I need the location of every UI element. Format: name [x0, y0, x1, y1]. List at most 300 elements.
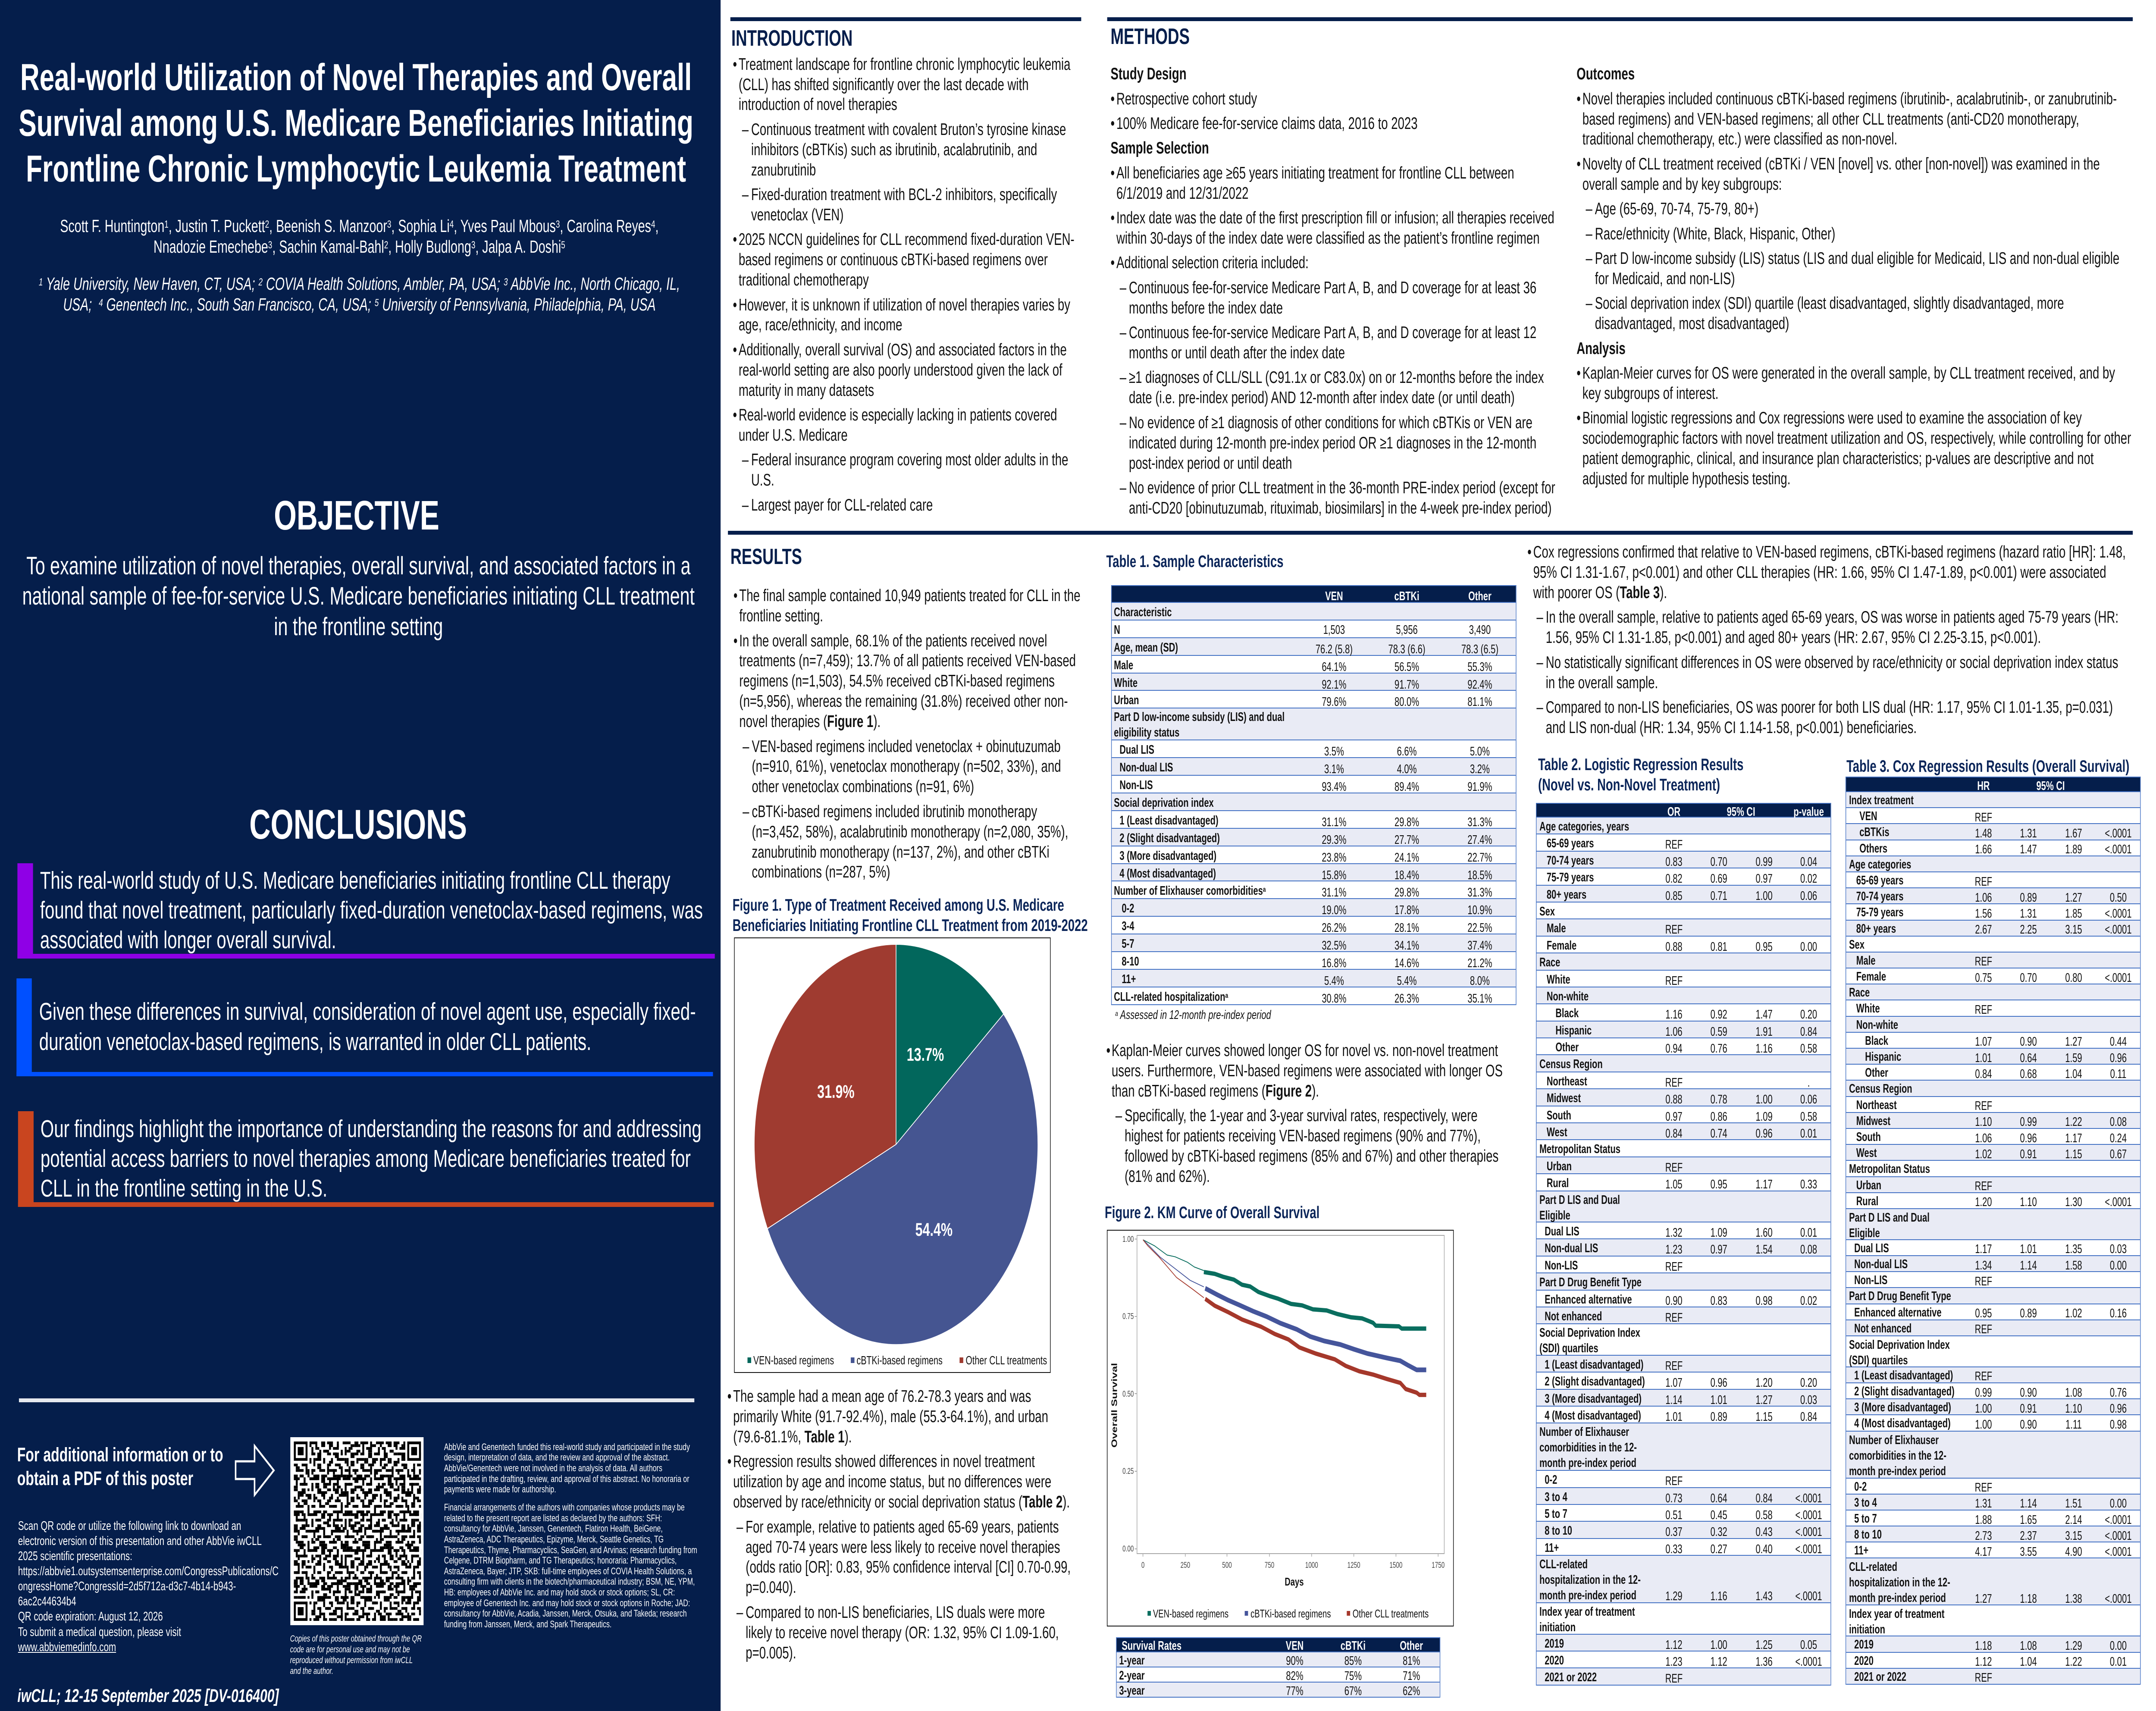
table 2: logistic regression: <.0001: [1795, 1589, 1822, 1603]
KM legend: [1147, 1607, 1429, 1620]
table 3: Cox regression: 0.99: [2020, 1115, 2037, 1129]
table 3 header: [1846, 777, 2140, 792]
table 3: Cox regression: Index treatment: [1849, 793, 1914, 807]
table 3: Cox regression: 3 to 4: [1854, 1496, 1877, 1510]
table 2: logistic regression: 0.97: [1755, 872, 1773, 886]
table 1: sample characteristics: 11+: [1122, 972, 1136, 986]
methods: outcomes and analysis: Novel therapies included continuous cBTKi-based regimens (ibrutinib-, acalabrutinib-, or zanubrutinib-: [1583, 90, 2117, 108]
table 2 header: [1536, 803, 1830, 818]
table 3: Cox regression: REF: [1975, 1099, 1992, 1113]
table 1: sample characteristics: 92.1%: [1322, 678, 1346, 692]
table 2: logistic regression: 0.69: [1711, 872, 1727, 886]
table 3: Cox regression: initiation: [1849, 1623, 1885, 1636]
objective text: To examine utilization of novel therapies, overall survival, and associated factors in a: [26, 552, 691, 580]
results text: demographics and regression: For example, relative to patients aged 65-69 years, patients: [746, 1518, 1059, 1536]
table 3: Cox regression: 0-2: [1854, 1480, 1867, 1494]
results text: Kaplan-Meier: Kaplan-Meier curves showed longer OS for novel vs. non-novel treatment: [1112, 1041, 1498, 1060]
callout: conclusion 3: CLL in the frontline setting in the U.S.: [41, 1175, 327, 1202]
table 3: Cox regression: 1.10: [1975, 1115, 1992, 1129]
x axis tick labels: 750: [1265, 1561, 1274, 1570]
table 2: logistic regression: 1.23: [1665, 1243, 1683, 1257]
results text: Kaplan-Meier: (81% and 62%).: [1125, 1167, 1210, 1186]
table 2: logistic regression: Male: [1547, 921, 1566, 935]
table 2: logistic regression: Black: [1555, 1006, 1579, 1020]
results text: sample and treatment: frontline setting.: [739, 607, 823, 625]
table 3: Cox regression: <.0001: [2105, 1529, 2132, 1543]
table 2: logistic regression: Non-dual LIS: [1545, 1241, 1598, 1255]
table 3: Cox regression: 0.89: [2020, 891, 2037, 905]
table 3: Cox regression: 1.27: [2065, 1035, 2082, 1049]
table 2: logistic regression: 1.05: [1665, 1178, 1683, 1191]
icon: arrow: [232, 1440, 278, 1501]
table 1: sample characteristics: 3,490: [1469, 623, 1491, 637]
conference citation: iwCLL; 12-15 September 2025 [DV-016400]: [17, 1686, 279, 1706]
table 2: logistic regression: 1.43: [1755, 1589, 1773, 1603]
table 1: sample characteristics: Urban: [1114, 693, 1139, 707]
introduction text: [733, 55, 1075, 520]
figure 2 heading: Figure 2. KM Curve of Overall Survival: [1105, 1203, 1319, 1222]
table 1: sample characteristics: 76.2 (5.8): [1316, 642, 1353, 656]
introduction text: Largest payer for CLL-related care: [751, 496, 933, 514]
curve: cBTKi-based: [1143, 1240, 1426, 1370]
callout: conclusion 2: [16, 978, 713, 1076]
table: survival rates: 71%: [1403, 1669, 1420, 1683]
table 2: logistic regression: 1.12: [1711, 1655, 1727, 1669]
table 2: logistic regression: Age categories, years: [1539, 820, 1629, 834]
table 3: Cox regression: 1.01: [1975, 1051, 1992, 1065]
title: Real-world Utilization of Novel Therapies and Overall: [20, 56, 692, 98]
table 3: Cox regression: 0.50: [2110, 891, 2127, 905]
table 1: sample characteristics: 17.8%: [1395, 903, 1419, 917]
methods: study design and sample selection: within 30-days of the index date were classified as the patient’s frontline regimen: [1116, 229, 1540, 248]
methods: study design and sample selection: 6/1/2019 and 12/31/2022: [1116, 184, 1248, 203]
x axis tick labels: 250: [1181, 1561, 1190, 1570]
table 3: Cox regression: Hispanic: [1865, 1050, 1901, 1064]
table 3: Cox regression: 1.31: [1975, 1497, 1992, 1510]
table 3: Cox regression: month pre-index period: [1849, 1591, 1946, 1605]
QR instructions: [18, 1519, 279, 1655]
methods: study design and sample selection: months or until death after the index date: [1129, 344, 1345, 362]
methods: outcomes and analysis: Kaplan-Meier curves for OS were generated in the overall sample, by CLL treatment received, and by: [1583, 364, 2115, 382]
table 3: Cox regression: 0.95: [1975, 1307, 1992, 1320]
results text: Cox regression: with poorer OS (Table 3).: [1533, 583, 1667, 602]
objective text: in the frontline setting: [274, 613, 443, 641]
table 1: sample characteristics: 16.8%: [1322, 956, 1346, 970]
results text: Cox regression: Cox regressions confirmed that relative to VEN-based regimens, cBTKi-based regimens (hazard ratio [HR]: 1.48,: [1533, 543, 2126, 561]
table 2: logistic regression: REF: [1665, 923, 1683, 937]
table 2: logistic regression: REF: [1665, 1474, 1683, 1488]
x axis tick labels: 1750: [1432, 1561, 1445, 1570]
table 2: logistic regression: 1.47: [1755, 1008, 1773, 1022]
table 3: Cox regression: 1.02: [1975, 1147, 1992, 1161]
table 3: Cox regression: Index year of treatment: [1849, 1607, 1945, 1621]
table 1: sample characteristics: Characteristic: [1114, 605, 1172, 619]
table 1: sample characteristics: 55.3%: [1467, 660, 1492, 674]
table 3: Cox regression: 1.04: [2020, 1655, 2037, 1669]
table 3: Cox regression: 0.01: [2110, 1655, 2127, 1669]
table 2: logistic regression: 0.89: [1711, 1410, 1727, 1424]
table 3: Cox regression: 1.67: [2065, 827, 2082, 840]
table 1: sample characteristics: 3 (More disadvantaged): [1119, 849, 1216, 863]
pie value labels: 13.7%: [907, 1044, 944, 1065]
results text: Cox regression: In the overall sample, relative to patients aged 65-69 years, OS was worse in patients aged 75-79 years (HR:: [1546, 608, 2118, 627]
figure 1 heading: [733, 895, 1088, 936]
table 3: Cox regression: [1846, 777, 2141, 1685]
table 2: logistic regression: 0.01: [1800, 1127, 1817, 1141]
table: survival rates: [1116, 1637, 1440, 1698]
results text: demographics and regression: p=0.005).: [746, 1644, 796, 1662]
methods: outcomes and analysis: Part D low-income subsidy (LIS) status (LIS and dual eligible for Medicaid, LIS and non-dual eligible: [1595, 249, 2119, 268]
disclosures: funding from Janssen, Merck, and Spark Therapeutics.: [444, 1619, 611, 1630]
table 3: Cox regression: 2.73: [1975, 1529, 1992, 1543]
table 3: Cox regression: 0.64: [2020, 1051, 2037, 1065]
table 2: logistic regression: <.0001: [1795, 1525, 1822, 1539]
table 3: Cox regression: Race: [1849, 986, 1870, 1000]
table 3: Cox regression: 0.03: [2110, 1242, 2127, 1256]
table 2: logistic regression: 1.07: [1665, 1376, 1683, 1390]
table 1: sample characteristics: 21.2%: [1467, 956, 1492, 970]
y axis tick labels: 0.75: [1122, 1312, 1134, 1321]
table 3: Cox regression: 0.99: [1975, 1386, 1992, 1400]
authors: Scott F. Huntington1, Justin T. Puckett2, Beenish S. Manzoor3, Sophia Li4, Yves Paul Mbous3, Carolina Reyes4,: [60, 216, 659, 236]
table 3: Cox regression: Part D Drug Benefit Type: [1849, 1289, 1951, 1303]
table 2: logistic regression: Index year of treatment: [1539, 1605, 1635, 1619]
QR code: [290, 1437, 423, 1625]
table 2: logistic regression: Northeast: [1547, 1075, 1587, 1088]
table 1: sample characteristics: 3.1%: [1324, 762, 1344, 776]
table 3: Cox regression: 0.84: [1975, 1067, 1992, 1081]
table 2: logistic regression: 1.00: [1711, 1638, 1727, 1652]
table 1: sample characteristics: 4.0%: [1397, 762, 1417, 776]
methods: outcomes and analysis: disadvantaged, most disadvantaged): [1595, 314, 1789, 333]
table 2: logistic regression: 0.78: [1711, 1093, 1727, 1106]
table 2: logistic regression: Eligible: [1539, 1209, 1570, 1222]
x axis tick labels: 500: [1222, 1561, 1232, 1570]
table 1: sample characteristics: 18.4%: [1395, 868, 1419, 882]
results text: sample and treatment: In the overall sample, 68.1% of the patients received novel: [739, 631, 1047, 650]
methods: outcomes and analysis: Age (65-69, 70-74, 75-79, 80+): [1595, 200, 1758, 218]
methods: study design and sample selection: months before the index date: [1129, 299, 1283, 317]
table 3: Cox regression: 1.34: [1975, 1259, 1992, 1272]
survival rates header: Other: [1400, 1639, 1423, 1653]
results text: demographics and regression: primarily White (91.7-92.4%), male (55.3-64.1%), and urban: [733, 1407, 1048, 1426]
table 3: Cox regression: 1.22: [2065, 1655, 2082, 1669]
table 3: Cox regression: 1.31: [2020, 907, 2037, 921]
table 3: Cox regression: 1.06: [1975, 1131, 1992, 1145]
table 3: Cox regression: <.0001: [2105, 1592, 2132, 1606]
table 1: sample characteristics: 34.1%: [1395, 939, 1419, 953]
table 2: logistic regression: REF: [1665, 1076, 1683, 1090]
callout: conclusion 1: associated with longer overall survival.: [40, 927, 336, 954]
table 1: sample characteristics: 78.3 (6.5): [1461, 642, 1498, 656]
table 3: Cox regression: 0.00: [2110, 1639, 2127, 1653]
table 3 header: HR: [1977, 779, 1990, 793]
table 2: logistic regression: 1.01: [1711, 1393, 1727, 1407]
table 2: logistic regression: 0.58: [1755, 1508, 1773, 1522]
table 3: Cox regression: <.0001: [2105, 827, 2132, 840]
affiliations: 1 Yale University, New Haven, CT, USA; 2 COVIA Health Solutions, Ambler, PA, USA; 3 AbbVie Inc., North Chicago, IL,: [39, 274, 680, 294]
table 3: Cox regression: 1.65: [2020, 1513, 2037, 1526]
table 2: logistic regression: <.0001: [1795, 1542, 1822, 1556]
table 3: Cox regression: 1 (Least disadvantaged): [1854, 1369, 1953, 1382]
table 2: logistic regression: <.0001: [1795, 1508, 1822, 1522]
table 3: Cox regression: REF: [1975, 1179, 1992, 1193]
objective text: national sample of fee-for-service U.S. Medicare beneficiaries initiating CLL treatment: [22, 582, 695, 610]
table 2: logistic regression: 0.43: [1755, 1525, 1773, 1539]
pie value labels: [817, 1044, 953, 1240]
table 2: logistic regression: 0.02: [1800, 1294, 1817, 1308]
table 1: sample characteristics: 23.8%: [1322, 851, 1346, 865]
table 3: Cox regression: 0.90: [2020, 1035, 2037, 1049]
y axis tick labels: 0.50: [1122, 1390, 1134, 1399]
table 2: logistic regression: Part D Drug Benefit Type: [1539, 1275, 1642, 1289]
table 3: Cox regression: Non-white: [1856, 1018, 1898, 1032]
table 1: sample characteristics: 14.6%: [1395, 956, 1419, 970]
results text: sample and treatment: (n=5,956), whereas the remaining (31.8%) received other non-: [739, 692, 1068, 711]
table 3: Cox regression: 1.51: [2065, 1497, 2082, 1510]
table 3: Cox regression: 1.27: [1975, 1592, 1992, 1606]
table 2: logistic regression: 0.58: [1800, 1042, 1817, 1056]
table 2 header: 95% CI: [1727, 805, 1755, 819]
table 2: logistic regression: Midwest: [1547, 1091, 1581, 1105]
table 3: Cox regression: 1.31: [2020, 827, 2037, 840]
table 3: Cox regression: 1.30: [2065, 1195, 2082, 1209]
table 2: logistic regression: REF: [1665, 1359, 1683, 1373]
y axis tick labels: 1.00: [1122, 1235, 1134, 1244]
table 1: sample characteristics: Dual LIS: [1119, 743, 1154, 757]
introduction text: Federal insurance program covering most older adults in the: [751, 451, 1068, 469]
introduction text: However, it is unknown if utilization of novel therapies varies by: [739, 296, 1070, 314]
pie legend: cBTKi-based regimens: [857, 1354, 943, 1367]
table 3: Cox regression: 0.90: [2020, 1418, 2037, 1432]
table 2: logistic regression: 0.20: [1800, 1008, 1817, 1022]
QR instructions: To submit a medical question, please visit: [18, 1625, 181, 1639]
table 3: Cox regression: Others: [1859, 842, 1887, 856]
table 2: logistic regression: 1.16: [1711, 1589, 1727, 1603]
introduction text: U.S.: [751, 471, 774, 489]
table 2: logistic regression: 0.96: [1711, 1376, 1727, 1390]
methods: study design and sample selection: ≥1 diagnoses of CLL/SLL (C91.1x or C83.0x) on or 12-months before the index: [1129, 368, 1544, 387]
table 3: Cox regression: 0.76: [2110, 1386, 2127, 1400]
disclosures: consultancy for AbbVie, Janssen, Genentech, Flatiron Health, BeiGene,: [444, 1523, 663, 1534]
table 1: sample characteristics: 31.1%: [1322, 886, 1346, 899]
methods: study design and sample selection: Index date was the date of the first prescription fill or infusion; all therapies received: [1116, 209, 1554, 227]
results text: sample and treatment: treatments (n=7,459); 13.7% of all patients received VEN-based: [739, 652, 1076, 670]
table 2: logistic regression: REF: [1665, 838, 1683, 852]
table 3: Cox regression: REF: [1975, 1369, 1992, 1383]
table 2: logistic regression: Dual LIS: [1545, 1225, 1579, 1238]
table: survival rates: 90%: [1286, 1654, 1304, 1668]
table 2: logistic regression: 1.20: [1755, 1376, 1773, 1390]
table 3: Cox regression: REF: [1975, 875, 1992, 889]
table 3: Cox regression: 1.08: [2065, 1386, 2082, 1400]
survival rates header: cBTKi: [1341, 1639, 1366, 1653]
title: Frontline Chronic Lymphocytic Leukemia Treatment: [26, 147, 686, 190]
table 1: sample characteristics: Non-LIS: [1119, 778, 1153, 792]
QR copyright note: Copies of this poster obtained through the QR: [290, 1634, 422, 1644]
methods: outcomes and analysis: traditional chemotherapy, etc.) were classified as non-novel.: [1583, 130, 1897, 148]
results text: sample and treatment: other venetoclax combinations (n=91, 6%): [752, 777, 974, 796]
table: survival rates: 3-year: [1119, 1684, 1145, 1698]
table 3: Cox regression: 11+: [1854, 1544, 1868, 1557]
table 2: logistic regression: 0.06: [1800, 889, 1817, 903]
table 2: logistic regression: 0.76: [1711, 1042, 1727, 1056]
table 1: sample characteristics: 8-10: [1122, 955, 1139, 968]
table 1: sample characteristics: 29.3%: [1322, 833, 1346, 847]
table 2 heading: Table 2. Logistic Regression Results: [1538, 755, 1743, 774]
methods: outcomes and analysis: overall sample and by key subgroups:: [1583, 175, 1782, 194]
callout: conclusion 3: [18, 1111, 714, 1207]
table 2: logistic regression: 1.54: [1755, 1243, 1773, 1257]
table 3: Cox regression: 1.58: [2065, 1259, 2082, 1272]
affiliations: USA; 4 Genentech Inc., South San Francisco, CA, USA; 5 University of Pennsylvania, Philadelphia, PA, USA: [63, 295, 656, 314]
disclosures: [444, 1442, 697, 1630]
QR copyright note: reproduced without permission from iwCLL: [290, 1655, 413, 1665]
table 2: logistic regression: <.0001: [1795, 1492, 1822, 1505]
table 3: Cox regression: 0.16: [2110, 1307, 2127, 1320]
table 2: logistic regression: 0.94: [1665, 1042, 1683, 1056]
table 1: sample characteristics: Age, mean (SD): [1114, 641, 1178, 655]
table 2: logistic regression: 0.96: [1755, 1127, 1773, 1141]
table: survival rates: 67%: [1344, 1684, 1362, 1698]
table 3: Cox regression: Dual LIS: [1854, 1241, 1889, 1255]
methods: outcomes and analysis: [1576, 64, 2131, 494]
table 2: logistic regression: 1.91: [1755, 1025, 1773, 1039]
table 3: Cox regression: 65-69 years: [1856, 874, 1903, 887]
methods: outcomes and analysis: Analysis: [1576, 339, 1626, 358]
QR instructions: QR code expiration: August 12, 2026: [18, 1610, 163, 1623]
results text: demographics and regression: p=0.040).: [746, 1578, 796, 1597]
methods: study design and sample selection: [1110, 64, 1555, 523]
table 2: logistic regression: 0.45: [1711, 1508, 1727, 1522]
introduction text: traditional chemotherapy: [739, 271, 869, 289]
methods: study design and sample selection: Additional selection criteria included:: [1116, 254, 1309, 272]
table: survival rates: 1-year: [1119, 1654, 1145, 1667]
table 3: Cox regression: 0.68: [2020, 1067, 2037, 1081]
table 2: logistic regression: 4 (Most disadvantaged): [1545, 1409, 1641, 1423]
table 3: Cox regression: hospitalization in the 12-: [1849, 1576, 1950, 1589]
table 2: logistic regression: 75-79 years: [1547, 871, 1594, 884]
table 1: sample characteristics: 2 (Slight disadvantaged): [1119, 831, 1220, 845]
title: [5, 55, 708, 191]
introduction heading: INTRODUCTION: [731, 25, 852, 50]
table 1: sample characteristics: 27.4%: [1467, 833, 1492, 847]
table 1: sample characteristics: 3.2%: [1470, 762, 1490, 776]
results text: sample and treatment: (n=910, 61%), venetoclax monotherapy (n=502, 33%), and: [752, 757, 1061, 776]
table 3: Cox regression: (SDI) quartiles: [1849, 1354, 1908, 1367]
table 3: Cox regression: Midwest: [1856, 1114, 1890, 1128]
table 1 header: cBTKi: [1395, 589, 1420, 603]
table 2: logistic regression: <.0001: [1795, 1655, 1822, 1669]
table 3: Cox regression: 1.08: [2020, 1639, 2037, 1653]
table 3: Cox regression: Black: [1865, 1034, 1888, 1048]
disclosures: HB: employees of AbbVie Inc. and may hold stock or stock options; SL, CR:: [444, 1587, 675, 1598]
table 3: Cox regression: 0.24: [2110, 1131, 2127, 1145]
table 3: Cox regression: CLL-related: [1849, 1560, 1897, 1574]
table 2: logistic regression: 0.33: [1800, 1178, 1817, 1191]
disclosures: AstraZeneca, Bayer; JTP, SKB: full-time employees of COVIA Health Solutions, a: [444, 1566, 692, 1576]
figure 1 heading: Figure 1. Type of Treatment Received among U.S. Medicare: [733, 896, 1064, 915]
table 3: Cox regression: REF: [1975, 811, 1992, 824]
QR instructions: https://abbvie1.outsystemsenterprise.com/CongressPublications/C: [18, 1564, 279, 1578]
slice: VEN-based 13.7%: [896, 944, 1003, 1144]
callout: conclusion 1: This real-world study of U.S. Medicare beneficiaries initiating frontline CLL therapy: [40, 867, 671, 894]
table 3: Cox regression: month pre-index period: [1849, 1464, 1946, 1478]
table 2: logistic regression: 0.58: [1800, 1110, 1817, 1124]
table 3: Cox regression: 1.15: [2065, 1147, 2082, 1161]
callout: conclusion 3: potential access barriers to novel therapies among Medicare beneficiaries treated for: [41, 1145, 691, 1172]
table 3: Cox regression: 2.37: [2020, 1529, 2037, 1543]
table 2: logistic regression: 2020: [1545, 1654, 1564, 1667]
table 3: Cox regression: <.0001: [2105, 1513, 2132, 1526]
objective text: [7, 551, 710, 642]
table 2: logistic regression: 2019: [1545, 1637, 1564, 1651]
table 1: sample characteristics: 0-2: [1122, 902, 1134, 915]
table 1: sample characteristics: Male: [1114, 658, 1133, 672]
table 2: logistic regression: 1.36: [1755, 1655, 1773, 1669]
table 2: logistic regression: 0.33: [1665, 1542, 1683, 1556]
table 3: Cox regression: Age categories: [1849, 858, 1911, 871]
callout: conclusion 1: found that novel treatment, particularly fixed-duration venetoclax-based regimens, was: [40, 897, 703, 924]
table 2: logistic regression: 3 (More disadvantaged): [1545, 1392, 1642, 1406]
table 2: logistic regression: Non-white: [1547, 990, 1589, 1003]
table 1: sample characteristics: 10.9%: [1467, 903, 1492, 917]
table 2: logistic regression: 0.51: [1665, 1508, 1683, 1522]
table 1: sample characteristics: 37.4%: [1467, 939, 1492, 953]
table 2: logistic regression: Enhanced alternative: [1545, 1293, 1632, 1307]
table 3: Cox regression: 1.00: [1975, 1418, 1992, 1432]
table: survival rates: 77%: [1286, 1684, 1304, 1698]
table 3: Cox regression: 0.75: [1975, 971, 1992, 985]
additional information heading: obtain a PDF of this poster: [17, 1467, 193, 1489]
table 2: logistic regression: 0.97: [1711, 1243, 1727, 1257]
disclosures: employee of Genentech Inc. and may hold stock or stock options in Roche; JAD:: [444, 1597, 690, 1608]
QR instructions: 2025 scientific presentations:: [18, 1549, 132, 1563]
table 3: Cox regression: 3.15: [2065, 923, 2082, 937]
table 2: logistic regression: Not enhanced: [1545, 1310, 1602, 1323]
table 3: Cox regression: Non-dual LIS: [1854, 1257, 1908, 1271]
introduction text: zanubrutinib: [751, 161, 816, 179]
results text: demographics and regression: utilization by age and income status, but no differences were: [733, 1473, 1051, 1491]
table 2: logistic regression: 0.86: [1711, 1110, 1727, 1124]
table 3: Cox regression: South: [1856, 1130, 1881, 1144]
table 2: logistic regression: 1.09: [1755, 1110, 1773, 1124]
survival rates header: Survival Rates: [1122, 1639, 1181, 1653]
table 2: logistic regression: 1.09: [1711, 1226, 1727, 1240]
table 2: logistic regression: REF: [1665, 1672, 1683, 1686]
introduction text: inhibitors (cBTKis) such as ibrutinib, acalabrutinib, and: [751, 141, 1037, 159]
table 2: logistic regression: 0.40: [1755, 1542, 1773, 1556]
table 2: logistic regression: 0.70: [1711, 855, 1727, 869]
table 2: logistic regression: 0.08: [1800, 1243, 1817, 1257]
table 3: Cox regression: Metropolitan Status: [1849, 1162, 1930, 1176]
introduction text: venetoclax (VEN): [751, 206, 843, 224]
table 3: Cox regression: Female: [1856, 970, 1886, 984]
table 2: logistic regression: 0.98: [1755, 1294, 1773, 1308]
table 2: logistic regression: South: [1547, 1109, 1571, 1122]
introduction text: Continuous treatment with covalent Bruton’s tyrosine kinase: [751, 120, 1066, 139]
table 3: Cox regression: 2 (Slight disadvantaged): [1854, 1385, 1955, 1398]
table 2: logistic regression: 1.15: [1755, 1410, 1773, 1424]
methods: outcomes and analysis: key subgroups of interest.: [1583, 384, 1718, 403]
table 3: Cox regression: 70-74 years: [1856, 890, 1903, 903]
QR instructions: ongressHome?CongressId=2d5f712a-d3c7-4b14-b943-: [18, 1579, 236, 1593]
table 1: sample characteristics: 3-4: [1122, 919, 1134, 933]
introduction text: Additionally, overall survival (OS) and associated factors in the: [739, 341, 1067, 359]
pie legend: Other CLL treatments: [966, 1354, 1047, 1367]
disclosures: consultancy for AbbVie, Acadia, Janssen, Merck, Otsuka, and Takeda; research: [444, 1608, 687, 1619]
table 2: logistic regression: 0.99: [1755, 855, 1773, 869]
